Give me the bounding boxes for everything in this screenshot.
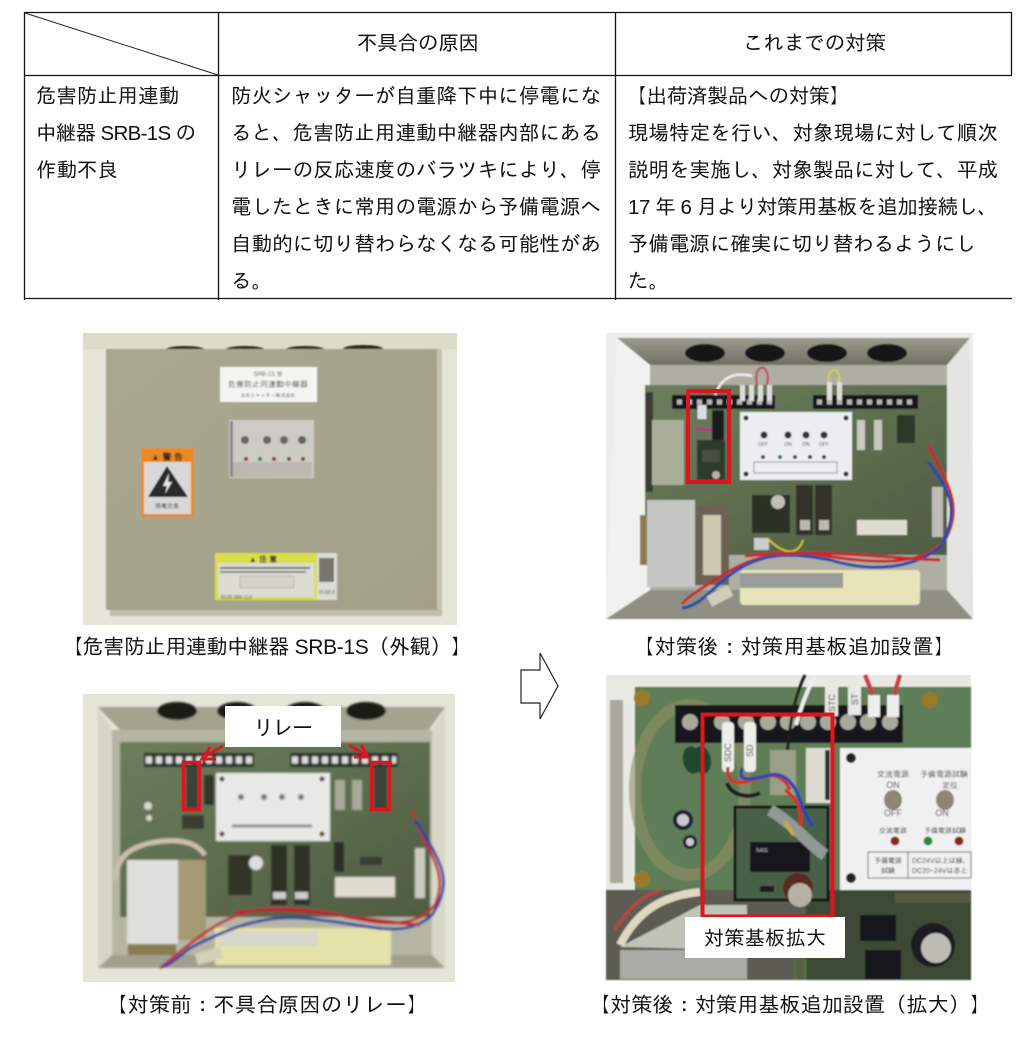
added sub-board [735, 807, 828, 907]
countermeasure text [626, 85, 998, 293]
arrow: to right relay [349, 745, 368, 757]
warning sticker: 感電注意 [155, 503, 179, 510]
switch panel [740, 412, 852, 480]
cause text: リレーの反応速度のバラツキにより、停 [231, 159, 601, 182]
callout: enlarged board label [685, 917, 845, 958]
control window [229, 420, 314, 478]
caution sticker: D-02-3 [319, 590, 335, 596]
cause text [231, 85, 601, 293]
fuses [752, 415, 943, 551]
switch panel: ON [784, 442, 792, 448]
switch panel: OFF [758, 442, 768, 448]
photo: before countermeasure [83, 694, 455, 982]
switch panel: ON [935, 808, 949, 818]
warning sticker: ▲ 警 告 [151, 452, 183, 462]
wires [727, 767, 812, 826]
switch panel: 予備電源試験 [920, 769, 968, 779]
callout: relay label: リレー [253, 717, 313, 740]
switch panel [840, 748, 971, 890]
photo: exterior [83, 333, 457, 625]
wire sleeves: ST [850, 693, 860, 705]
switch panel: 交流電源 [877, 770, 909, 779]
switch panel: OFF [819, 442, 829, 448]
added board [695, 405, 725, 480]
switch panel: ON [886, 780, 900, 790]
relay on PCB [673, 745, 832, 849]
arrow [521, 653, 558, 719]
switch panel: 試験 [881, 867, 895, 875]
caption: before countermeasure: 【対策前：不具合原因のリレー】 [106, 994, 428, 1017]
caution sticker: ▲ 注 意 [249, 554, 277, 564]
countermeasure text: た。 [628, 270, 669, 293]
screws [634, 690, 650, 706]
row label: 作動不良 [36, 159, 118, 182]
wire sleeves: STC [827, 693, 837, 712]
row label [36, 85, 196, 182]
table header: cause: 不具合の原因 [357, 32, 479, 55]
components [144, 766, 425, 905]
callout: enlarged board label: 対策基板拡大 [704, 928, 826, 950]
battery [215, 928, 391, 965]
caution sticker [215, 553, 337, 601]
wires [160, 810, 443, 968]
switch panel: 定位 [942, 781, 958, 790]
row label: 中継器 SRB-1S の [36, 122, 196, 145]
caption: after countermeasure: 【対策後：対策用基板追加設置】 [633, 636, 955, 659]
countermeasure text: 17 年 6 月より対策用基板を追加接続し、 [628, 196, 998, 219]
arrow: to left relay [202, 746, 223, 759]
callout: relay label [225, 706, 341, 747]
switch panel: OFF [884, 808, 902, 818]
added sub-board: NAIS [756, 848, 768, 854]
warning sticker [141, 448, 194, 517]
highlight: added board [688, 391, 729, 482]
photo: after countermeasure [606, 333, 973, 619]
switch panel: 予備電源 [874, 857, 902, 865]
row label: 危害防止用連動 [36, 85, 179, 108]
photo: enlarged board [606, 675, 971, 980]
switch panel [216, 773, 330, 841]
wire sleeves: SDC [723, 742, 733, 762]
highlight: enlarged board [702, 714, 832, 916]
white name plate [220, 367, 317, 402]
caption: enlarged board: 【対策後：対策用基板追加設置（拡大）】 [589, 994, 991, 1017]
cause text: 電したときに常用の電源から予備電源へ [231, 196, 601, 219]
wire sleeves: SD [745, 744, 755, 757]
countermeasure text: 説明を実施し、対象製品に対して、平成 [628, 159, 998, 182]
table header: countermeasures: これまでの対策 [743, 32, 886, 55]
countermeasure text: 予備電源に確実に切り替わるようにし [628, 233, 976, 256]
caution sticker: 0120-365-113 [221, 595, 252, 601]
highlight: left relay [184, 762, 200, 810]
switch panel: ON [802, 442, 810, 448]
cause text: る。 [231, 270, 272, 293]
wire sleeves [722, 675, 900, 775]
white name plate: 危害防止用連動中継器 [228, 379, 308, 389]
switch panel: 予備電源試験 [924, 827, 966, 835]
cause text: 防火シャッターが自重降下中に停電にな [231, 85, 601, 108]
lower components [615, 890, 970, 979]
countermeasure text: 現場特定を行い、対象現場に対して順次 [628, 122, 998, 145]
caption: exterior: 【危害防止用連動中継器 SRB-1S（外観）】 [62, 636, 472, 659]
cause text: ると、危害防止用連動中継器内部にある [231, 122, 601, 145]
terminal blocks [672, 368, 918, 409]
transformer [640, 500, 729, 587]
terminal blocks [144, 753, 398, 767]
cause text: 自動的に切り替わらなくなる可能性があ [231, 233, 601, 256]
white name plate: 文化シャッター株式会社 [240, 392, 296, 399]
terminal block [675, 705, 903, 743]
switch panel: DC20~24Vは赤と [912, 867, 967, 875]
white name plate: SRB-1S 型 [253, 371, 283, 378]
highlight: right relay [372, 762, 390, 810]
wires [682, 445, 953, 608]
battery [740, 570, 920, 605]
countermeasure text: 【出荷済製品への対策】 [626, 85, 850, 108]
transformer [115, 841, 206, 955]
switch panel: 交流電源 [879, 827, 907, 835]
switch panel: DC24V以上は緑、 [912, 857, 970, 865]
